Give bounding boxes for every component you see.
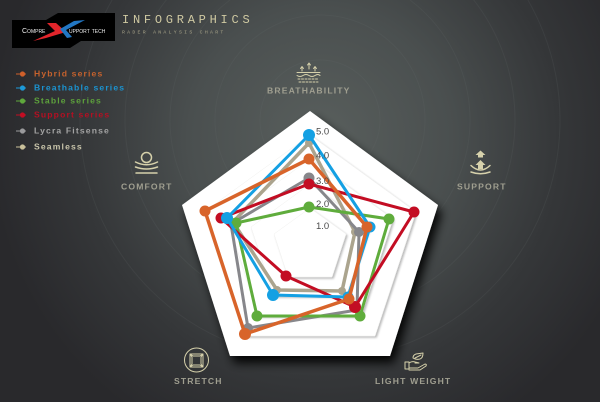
logo [12,13,115,48]
logo: Compre [22,28,46,35]
series: Stable [230,202,394,322]
scale labels: 5.0 [316,126,329,138]
legend [16,68,125,152]
icon: breathability [297,63,320,82]
scale labels: 3.0 [316,176,329,187]
axis: Stretch [174,348,223,386]
icon: comfort [136,152,158,173]
axis: Breathability [267,63,351,96]
icon: support [471,150,490,174]
axis: Comfort: COMFORT [121,182,172,192]
axis: Support: SUPPORT [457,182,507,192]
axis: Light Weight [375,353,451,386]
scale labels [316,126,329,232]
series: Support [216,178,420,313]
scale labels: 1.0 [316,221,329,232]
axis: Support [457,150,507,192]
subtitle: RADER ANALYSIS CHART [122,30,226,36]
series: Seamless [233,139,359,295]
scale labels: 4.0 [316,150,329,162]
legend item: Support series: Support series [34,110,110,120]
axis: Breathability: BREATHABILITY [267,86,351,96]
guide rings [204,135,416,336]
series: Breathable [221,129,376,302]
legend item: Seamless: Seamless [34,142,83,152]
title: INFOGRAPHICS [122,13,253,27]
axis: Comfort [121,152,172,192]
logo: upport tech [69,28,106,35]
outer white pentagon [182,111,438,356]
radar chart [182,111,438,356]
title [122,13,253,36]
axis: Stretch: STRETCH [174,376,223,386]
legend item: Lycra Fitsense: Lycra Fitsense [34,126,110,136]
icon: stretch [184,348,208,372]
scale labels: 2.0 [316,199,329,210]
series: Hybrid [200,154,372,340]
legend item: Stable series: Stable series [34,96,102,106]
legend item: Hybrid series: Hybrid series [34,68,103,78]
legend item: Breathable series: Breathable series [34,82,125,92]
axis: Light Weight: LIGHT WEIGHT [375,376,451,386]
series: Lycra Fitsense [231,172,364,333]
icon: light weight [405,353,426,370]
